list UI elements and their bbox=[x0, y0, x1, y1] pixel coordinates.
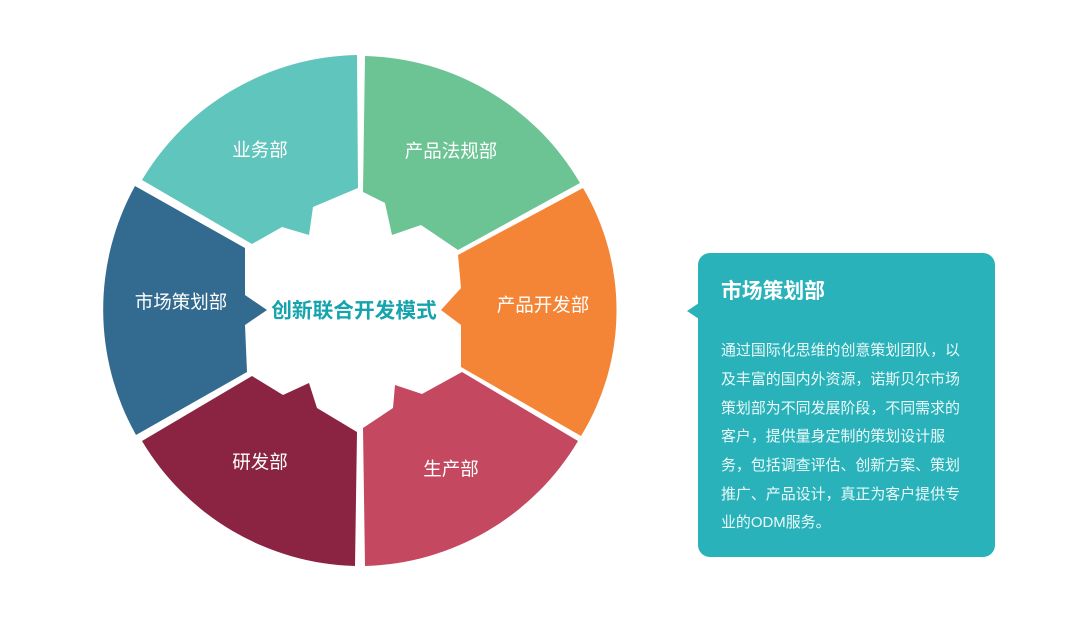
panel body text: 推广、产品设计，真正为客户提供专 bbox=[721, 485, 960, 503]
panel body text: 业的ODM服务。 bbox=[721, 514, 831, 531]
segment: 研发部: 研发部 bbox=[232, 452, 288, 472]
segment: 生产部 bbox=[363, 372, 578, 566]
segment: 生产部: 生产部 bbox=[423, 458, 479, 480]
center title: 创新联合开发模式 bbox=[271, 298, 437, 322]
panel body text: 客户，提供量身定制的策划设计服 bbox=[721, 428, 945, 445]
panel body text bbox=[721, 341, 960, 531]
panel body text: 及丰富的国内外资源，诺斯贝尔市场 bbox=[721, 370, 960, 388]
panel pointer bbox=[687, 303, 699, 319]
segment: 业务部: 业务部 bbox=[232, 140, 288, 160]
segment: 研发部 bbox=[142, 376, 357, 566]
segment: 产品法规部: 产品法规部 bbox=[405, 140, 497, 162]
panel background bbox=[698, 253, 995, 557]
segment: 市场策划部: 市场策划部 bbox=[135, 292, 227, 312]
segment: 产品开发部 bbox=[441, 188, 617, 436]
segment: 产品开发部: 产品开发部 bbox=[497, 294, 589, 316]
panel body text: 务，包括调查评估、创新方案、策划 bbox=[721, 456, 960, 474]
panel: 市场策划部 description bbox=[687, 253, 995, 557]
panel heading: 市场策划部 bbox=[721, 279, 825, 303]
segment: 产品法规部 bbox=[363, 56, 580, 250]
panel body text: 通过国际化思维的创意策划团队，以 bbox=[721, 341, 960, 359]
panel body text: 策划部为不同发展阶段，不同需求的 bbox=[721, 400, 960, 417]
segment: 业务部 bbox=[142, 55, 358, 244]
segment: 市场策划部 bbox=[103, 186, 267, 435]
segment wheel bbox=[103, 55, 617, 566]
